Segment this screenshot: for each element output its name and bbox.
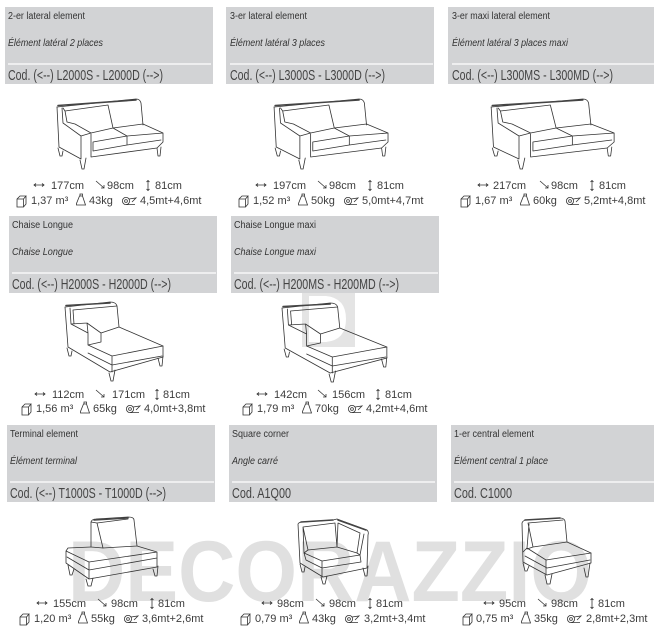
specs: 81cm (376, 598, 403, 610)
specs (461, 180, 645, 207)
panel: square corner header: Angle carré (231, 456, 278, 467)
specs: 5,2mt+4,8mt (584, 195, 645, 207)
specs: 70kg (315, 403, 339, 415)
specs: 1,67 m³ (475, 195, 513, 207)
icon: 2-seat lateral sofa (57, 99, 163, 169)
icon: square corner sofa (298, 519, 368, 584)
card: 1-er central element (451, 425, 654, 625)
specs: 4,0mt+3,8mt (144, 403, 205, 415)
specs: 4,2mt+4,6mt (366, 403, 427, 415)
specs: 81cm (163, 389, 190, 401)
panel: chaise longue maxi header (231, 216, 439, 293)
card: square corner (229, 425, 437, 625)
card: 3-er lateral element (226, 7, 434, 207)
specs: 98cm (329, 598, 356, 610)
specs: 155cm (53, 598, 86, 610)
specs: 2,8mt+2,3mt (586, 613, 647, 625)
specs: 65kg (93, 403, 117, 415)
panel: chaise longue maxi header: Chaise Longue maxi (234, 247, 317, 258)
card: chaise longue (9, 216, 217, 415)
panel: central header: Cod. C1000 (454, 485, 512, 502)
specs: 35kg (534, 613, 558, 625)
specs (20, 598, 203, 625)
specs: 81cm (385, 389, 412, 401)
panel: 3-er maxi header (448, 7, 654, 84)
specs (243, 389, 427, 415)
panel: terminal header: Cod. (<--) T1000S - T1000D (-->) (10, 485, 166, 502)
specs: 43kg (312, 613, 336, 625)
specs: 43kg (89, 195, 113, 207)
panel: central header (451, 425, 654, 502)
specs (17, 180, 201, 207)
card: 3-er maxi lateral element (448, 7, 654, 207)
panel: square corner header: Square corner (232, 429, 290, 440)
specs: 50kg (311, 195, 335, 207)
panel: chaise longue header: Chaise Longue (12, 247, 73, 258)
specs: 98cm (329, 180, 356, 192)
specs: 98cm (277, 598, 304, 610)
specs: 60kg (533, 195, 557, 207)
panel: chaise longue maxi header: Cod. (<--) H200MS - H200MD (-->) (234, 276, 399, 293)
specs: 81cm (158, 598, 185, 610)
specs (239, 180, 423, 207)
card: terminal element (7, 425, 215, 625)
panel: 2-er lateral header: 2-er lateral element (8, 11, 85, 22)
panel: terminal header: Terminal element (10, 429, 78, 440)
icon: terminal sofa (66, 517, 158, 586)
icon: central sofa (522, 518, 591, 584)
specs: 98cm (551, 598, 578, 610)
icon: 3-seat lateral sofa (274, 99, 388, 169)
specs (22, 389, 205, 415)
panel: 3-er lateral header: 3-er lateral element (230, 11, 307, 22)
specs: 0,75 m³ (476, 613, 514, 625)
specs: 1,20 m³ (34, 613, 72, 625)
panel: chaise longue maxi header: Chaise Longue maxi (234, 220, 316, 231)
specs: 171cm (112, 389, 145, 401)
panel: 3-er maxi header: Élément latéral 3 places maxi (452, 36, 569, 49)
panel: square corner header (229, 425, 437, 502)
specs: 156cm (332, 389, 365, 401)
panel: central header: Élément central 1 place (454, 454, 548, 467)
panel: terminal header: Élément terminal (10, 454, 78, 467)
specs (241, 598, 425, 625)
panel: 3-er lateral header: Élément latéral 3 places (230, 36, 325, 49)
panel: central header: 1-er central element (454, 429, 534, 440)
panel: 3-er lateral header: Cod. (<--) L3000S - L3000D (-->) (230, 67, 385, 84)
card: chaise longue maxi (231, 216, 439, 415)
icon: chaise longue (65, 302, 163, 381)
specs: 81cm (155, 180, 182, 192)
panel: 3-er lateral header (226, 7, 434, 84)
icon: chaise longue maxi (282, 303, 387, 382)
specs: 81cm (598, 598, 625, 610)
specs: 4,5mt+4,6mt (140, 195, 201, 207)
specs: 177cm (51, 180, 84, 192)
panel: 2-er lateral header (5, 7, 213, 84)
specs: 98cm (107, 180, 134, 192)
specs (463, 598, 647, 625)
specs: 217cm (493, 180, 526, 192)
panel: chaise longue header (9, 216, 217, 293)
specs: 142cm (274, 389, 307, 401)
specs: 112cm (52, 389, 84, 401)
watermark: DECORAZZIO: DECORAZZIO (68, 524, 592, 620)
panel: 3-er maxi header: 3-er maxi lateral element (452, 11, 550, 22)
specs: 1,56 m³ (36, 403, 74, 415)
specs: 1,52 m³ (253, 195, 291, 207)
specs: 3,6mt+2,6mt (142, 613, 203, 625)
panel: chaise longue header: Chaise Longue (12, 220, 73, 231)
specs: 81cm (599, 180, 626, 192)
card: 2-er lateral element (5, 7, 213, 207)
panel: 2-er lateral header: Élément latéral 2 places (8, 36, 103, 49)
specs: 3,2mt+3,4mt (364, 613, 425, 625)
panel: chaise longue header: Cod. (<--) H2000S - H2000D (-->) (12, 276, 171, 293)
panel: 2-er lateral header: Cod. (<--) L2000S - L2000D (-->) (8, 67, 163, 84)
specs: 1,37 m³ (31, 195, 69, 207)
specs: 0,79 m³ (255, 613, 293, 625)
specs: 55kg (91, 613, 115, 625)
specs: 81cm (377, 180, 404, 192)
specs: 95cm (499, 598, 526, 610)
specs: 98cm (111, 598, 138, 610)
panel: square corner header: Cod. A1Q00 (232, 485, 291, 502)
icon: 3-seat maxi lateral sofa (491, 99, 614, 169)
specs: 5,0mt+4,7mt (362, 195, 423, 207)
specs: 1,79 m³ (257, 403, 295, 415)
specs: 98cm (551, 180, 578, 192)
panel: terminal header (7, 425, 215, 502)
watermark logo block (302, 293, 355, 347)
specs: 197cm (273, 180, 306, 192)
